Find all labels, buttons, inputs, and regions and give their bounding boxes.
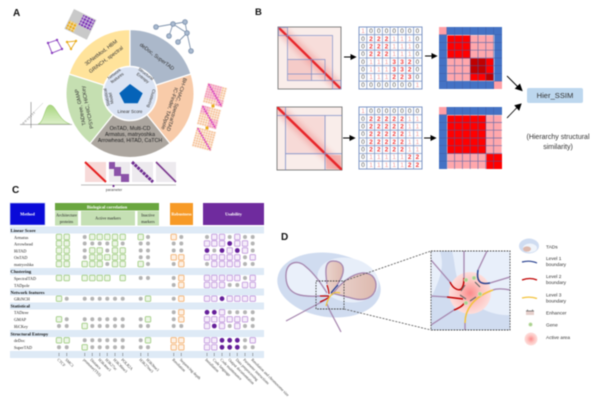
- matrix two numbers: 22222: [369, 131, 404, 138]
- matrix one numbers: 0000000: [361, 82, 412, 89]
- wedge: network features: GRiNCH, spectral: [88, 45, 125, 75]
- matrix two numbers: 22: [408, 154, 420, 161]
- rotated column labels: Installation: [204, 358, 220, 373]
- rotated column labels: Distance: [89, 358, 102, 371]
- loop: right: [331, 273, 376, 300]
- header: biological correlation: proteins: [60, 219, 74, 224]
- matrix two numbers: 11: [408, 139, 420, 146]
- matrix two numbers: 0000000: [369, 108, 420, 115]
- header: method: Method: [20, 212, 35, 216]
- rotated column labels: SMC3: [64, 358, 74, 368]
- matrix one numbers: 332: [392, 59, 412, 66]
- header: method: [10, 203, 45, 225]
- panel B: heatmap one: [278, 27, 341, 89]
- rotated column labels: Code maintenance: [219, 358, 243, 381]
- legend: level 2: Level 2: [546, 274, 562, 280]
- header: biological correlation: Active markers: [95, 216, 121, 220]
- arrow: [424, 136, 436, 140]
- section titles: [10, 228, 49, 336]
- parameter axis: parameter: [106, 188, 123, 192]
- matrix one numbers: 111: [369, 59, 389, 66]
- genes: [464, 276, 482, 305]
- zoomed inset: [431, 251, 510, 330]
- method names: matryoshka: [14, 262, 34, 267]
- tick marks: IIIIIIIIIIIIIIIIIII: [58, 352, 254, 357]
- panel label A: A: [13, 8, 20, 19]
- icon: gaussian curve: -3 -2 -1 0 1 2 3: [21, 110, 36, 126]
- panel C: table: [10, 203, 290, 397]
- wedge: clustering: BH-CHAC, SpectralTAD: [164, 77, 187, 132]
- method names: GRiNCH: [14, 296, 30, 302]
- matrix one numbers: 0: [361, 51, 365, 58]
- matrix one numbers: 0: [416, 44, 420, 50]
- wedge: statistical: TADtree, GMAP: [74, 88, 88, 126]
- matrix two numbers: 11: [408, 146, 420, 154]
- matrix one numbers: 111: [392, 51, 412, 58]
- matrix one numbers: 0: [416, 51, 420, 58]
- legend: active area: Active area: [546, 335, 570, 341]
- legend: level 3: [522, 292, 567, 304]
- section titles: Structural Entropy: [10, 331, 49, 336]
- matrix one numbers: 0: [416, 66, 420, 74]
- header: robustness: Robustness: [171, 212, 192, 216]
- matrix two numbers: 11: [408, 131, 420, 138]
- rotated column labels: Data preprocessing: [235, 358, 259, 382]
- icon: tree graph: [154, 20, 193, 53]
- loop: upper: [326, 261, 343, 294]
- wedge: statistical: PSYCHIC, HiCKey: [80, 85, 95, 129]
- legend: level 2: boundary: [546, 280, 567, 286]
- inner hub: Model: [107, 92, 115, 104]
- legend: level 3: boundary: [546, 298, 567, 304]
- section titles: Clustering: [10, 269, 32, 274]
- inner hub: Clustering: [146, 89, 157, 109]
- method names: deDoc: [14, 338, 25, 343]
- matrix one numbers: 0: [416, 74, 420, 81]
- matrix two numbers: 0: [361, 131, 365, 138]
- section titles: Network features: [10, 290, 45, 295]
- row: GMAP: [56, 317, 255, 322]
- matrix one numbers: 222: [369, 51, 389, 58]
- rotated column labels: Output documentation: [227, 358, 255, 385]
- enhancers: [460, 282, 480, 301]
- rotated column labels: POLR2A: [120, 358, 134, 371]
- legend: level 1: boundary: [546, 262, 567, 268]
- matrix two numbers: [359, 107, 422, 169]
- method names: GMAP: [14, 317, 27, 322]
- method names: SuperTAD: [14, 345, 32, 350]
- matrix one numbers: 0: [361, 36, 365, 43]
- rotated column labels: CTCF: [56, 358, 67, 368]
- icon: gaussian curve: [20, 102, 72, 128]
- rotated column labels: Sequencing depth: [179, 358, 201, 380]
- row: SpectralTAD: [56, 275, 255, 281]
- caption: similarity): [543, 144, 573, 151]
- rotated column labels: H3K27ac: [104, 358, 118, 371]
- inner hub: features: [110, 71, 125, 84]
- matrix one numbers: 111: [369, 66, 389, 74]
- matrix one numbers: 0000000: [369, 28, 420, 35]
- matrix two numbers: 11111: [369, 162, 404, 169]
- row: HiCKey: [57, 323, 255, 329]
- row: TADtree: [172, 310, 255, 315]
- matrix one numbers: 0: [361, 59, 365, 66]
- inner hub: Linear Score: [118, 109, 143, 114]
- matrix two numbers: 1: [361, 108, 365, 115]
- header: robustness: [170, 203, 193, 225]
- method names: HiCKey: [14, 324, 29, 329]
- panel D: chromatin cell diagram: [273, 246, 385, 332]
- method names: Arrowhead: [14, 242, 34, 246]
- arrow: [425, 54, 436, 58]
- header: biological correlation: Inactive: [141, 212, 155, 218]
- arrow: [343, 136, 354, 140]
- panel label B: B: [255, 7, 262, 18]
- matrix two numbers: 0: [361, 146, 365, 154]
- matrix one numbers: 332: [392, 66, 412, 74]
- legend: level 1: [522, 256, 567, 268]
- Hier_SSIM box: Hier_SSIM: [537, 91, 573, 100]
- header: usability: [203, 203, 264, 225]
- header: usability: Usability: [225, 212, 243, 216]
- matrix two numbers: 22222: [369, 116, 404, 123]
- icon: network matrix: [64, 9, 96, 40]
- icon: clustering matrices: [192, 83, 227, 151]
- legend: gene: Gene: [546, 322, 558, 328]
- wedge: linear score: [90, 94, 170, 158]
- legend: level 1: Level 1: [546, 256, 562, 262]
- matrix one numbers: [359, 27, 422, 89]
- legend: TADs: TADs: [546, 244, 558, 250]
- matrix two numbers: 0: [361, 116, 365, 123]
- method names: TADtree: [14, 310, 29, 315]
- row: Armatus: [56, 234, 255, 240]
- matrix one numbers: 0: [361, 74, 365, 81]
- matrix two numbers: 22222: [369, 139, 404, 146]
- icon: pentagon: [119, 84, 143, 103]
- colored matrix one: [439, 27, 502, 89]
- inner hub: Statistical: [102, 88, 111, 107]
- method names: SpectralTAD: [14, 276, 36, 281]
- zoom lines: [344, 251, 431, 330]
- method names: OnTAD: [14, 255, 27, 260]
- wedge: clustering: IC-Finder, TADpole: [159, 86, 179, 130]
- header: biological correlation: [55, 203, 159, 226]
- inner hub: Structural: [137, 66, 155, 81]
- legend: level 3: Level 3: [546, 292, 562, 298]
- matrix one numbers: 0: [416, 59, 420, 66]
- matrix two numbers: 11: [408, 116, 420, 123]
- header: biological correlation: markers: [141, 219, 155, 224]
- wedge: linear score: Arrowhead, HiTAD, CaTCH: [98, 138, 162, 144]
- wedge: linear score: Armatus, matryoshka: [105, 132, 155, 138]
- row: Arrowhead: [56, 241, 255, 246]
- boundaries: [320, 285, 340, 306]
- inner hub: [102, 66, 157, 120]
- row: SuperTAD: [57, 345, 255, 350]
- header: biological correlation: Biological correlation: [87, 204, 128, 210]
- wedge: structural entropy: deDoc, SuperTAD: [138, 42, 175, 72]
- rotated column labels: [56, 358, 290, 397]
- matrix two numbers: 11: [408, 124, 420, 130]
- boundaries in inset: [447, 270, 493, 323]
- legend: enhancer: Enhancer: [546, 310, 567, 316]
- caption: (Hierarchy structural: [526, 134, 590, 141]
- panel A: method wheel: [66, 29, 194, 158]
- method names: HiTAD: [14, 248, 26, 254]
- rotated column labels: Resolution and chromosome size: [250, 358, 290, 397]
- wedge: network features: 3DNetMod, HBM: [84, 39, 119, 67]
- arrow: [344, 55, 356, 59]
- matrix one numbers: 111: [369, 74, 389, 81]
- matrix one numbers: 222: [369, 36, 389, 43]
- matrix one numbers: 0: [416, 36, 420, 43]
- rotated column labels: H3K4me3: [97, 358, 112, 372]
- matrix two numbers: 11111: [369, 154, 404, 161]
- row: OnTAD: [56, 255, 255, 260]
- method names: [14, 235, 36, 350]
- arrow: to Hier_SSIM bottom: [507, 104, 521, 118]
- row: deDoc: [56, 338, 255, 343]
- wedge: statistical: [66, 74, 130, 144]
- section bars: [10, 226, 264, 358]
- inset border: [431, 251, 510, 330]
- section titles: Statistical: [10, 304, 31, 308]
- Hier_SSIM box: [527, 88, 583, 103]
- colored matrix two: [439, 107, 502, 169]
- rotated column labels: promoter(TSS): [82, 358, 102, 378]
- dashed selection box: [316, 281, 344, 309]
- fibers: [431, 251, 510, 330]
- matrix two numbers: 0: [361, 139, 365, 146]
- matrix two numbers: 0: [361, 124, 365, 130]
- loop: left: [286, 262, 327, 296]
- inner hub: Network: [106, 67, 122, 80]
- parameter heatmaps: [85, 162, 176, 182]
- active area: [449, 272, 491, 314]
- header: biological correlation: Architecture: [56, 212, 77, 218]
- row: GRiNCH: [56, 296, 255, 301]
- legend: level 2: [522, 274, 567, 286]
- panel B: heatmap two: [277, 107, 342, 170]
- wedge: linear score: OnTAD, Multi-CD: [110, 126, 151, 132]
- matrix two numbers: 22: [408, 162, 420, 169]
- row: HiTAD: [56, 248, 255, 253]
- rotated column labels: Resolution: [171, 358, 186, 373]
- matrix one numbers: 111: [392, 36, 412, 43]
- inner hub: Entropy: [136, 71, 151, 85]
- method names: Armatus: [14, 235, 29, 240]
- row: matryoshka: [56, 261, 255, 267]
- rotated column labels: H3K9me3: [145, 358, 160, 372]
- wedge: clustering: [130, 74, 194, 144]
- matrix one numbers: 0: [361, 66, 365, 74]
- panel label D: D: [281, 232, 288, 243]
- matrix one numbers: 1: [361, 28, 365, 35]
- row: TADpole: [172, 282, 255, 288]
- matrix two numbers: 22222: [369, 124, 404, 130]
- method names: TADpole: [14, 283, 30, 288]
- rotated column labels: H3K27me3: [138, 358, 154, 374]
- icon: network graphs: [47, 39, 77, 54]
- matrix one numbers: 111: [392, 44, 412, 50]
- matrix two numbers: 22222: [369, 146, 404, 154]
- legend: [519, 238, 570, 346]
- matrix one numbers: 1: [416, 82, 420, 89]
- rotated column labels: Code language: [212, 358, 231, 377]
- matrix one numbers: 0: [361, 44, 365, 50]
- chromatin tails: [286, 299, 341, 332]
- panel label C: C: [12, 185, 19, 196]
- wedge: network features: [69, 29, 130, 94]
- arrow: to Hier_SSIM top: [507, 76, 522, 90]
- rotated column labels: H3K36me3: [112, 358, 128, 374]
- caption: [526, 134, 590, 151]
- matrix one numbers: 222: [369, 44, 389, 50]
- section titles: Linear Score: [10, 228, 36, 233]
- matrix one numbers: 223: [392, 74, 412, 81]
- matrix two numbers: 0: [361, 154, 365, 161]
- matrix two numbers: 0: [361, 162, 365, 169]
- rotated column labels: Parameter instructions: [242, 358, 270, 386]
- parameter axis: [81, 185, 176, 192]
